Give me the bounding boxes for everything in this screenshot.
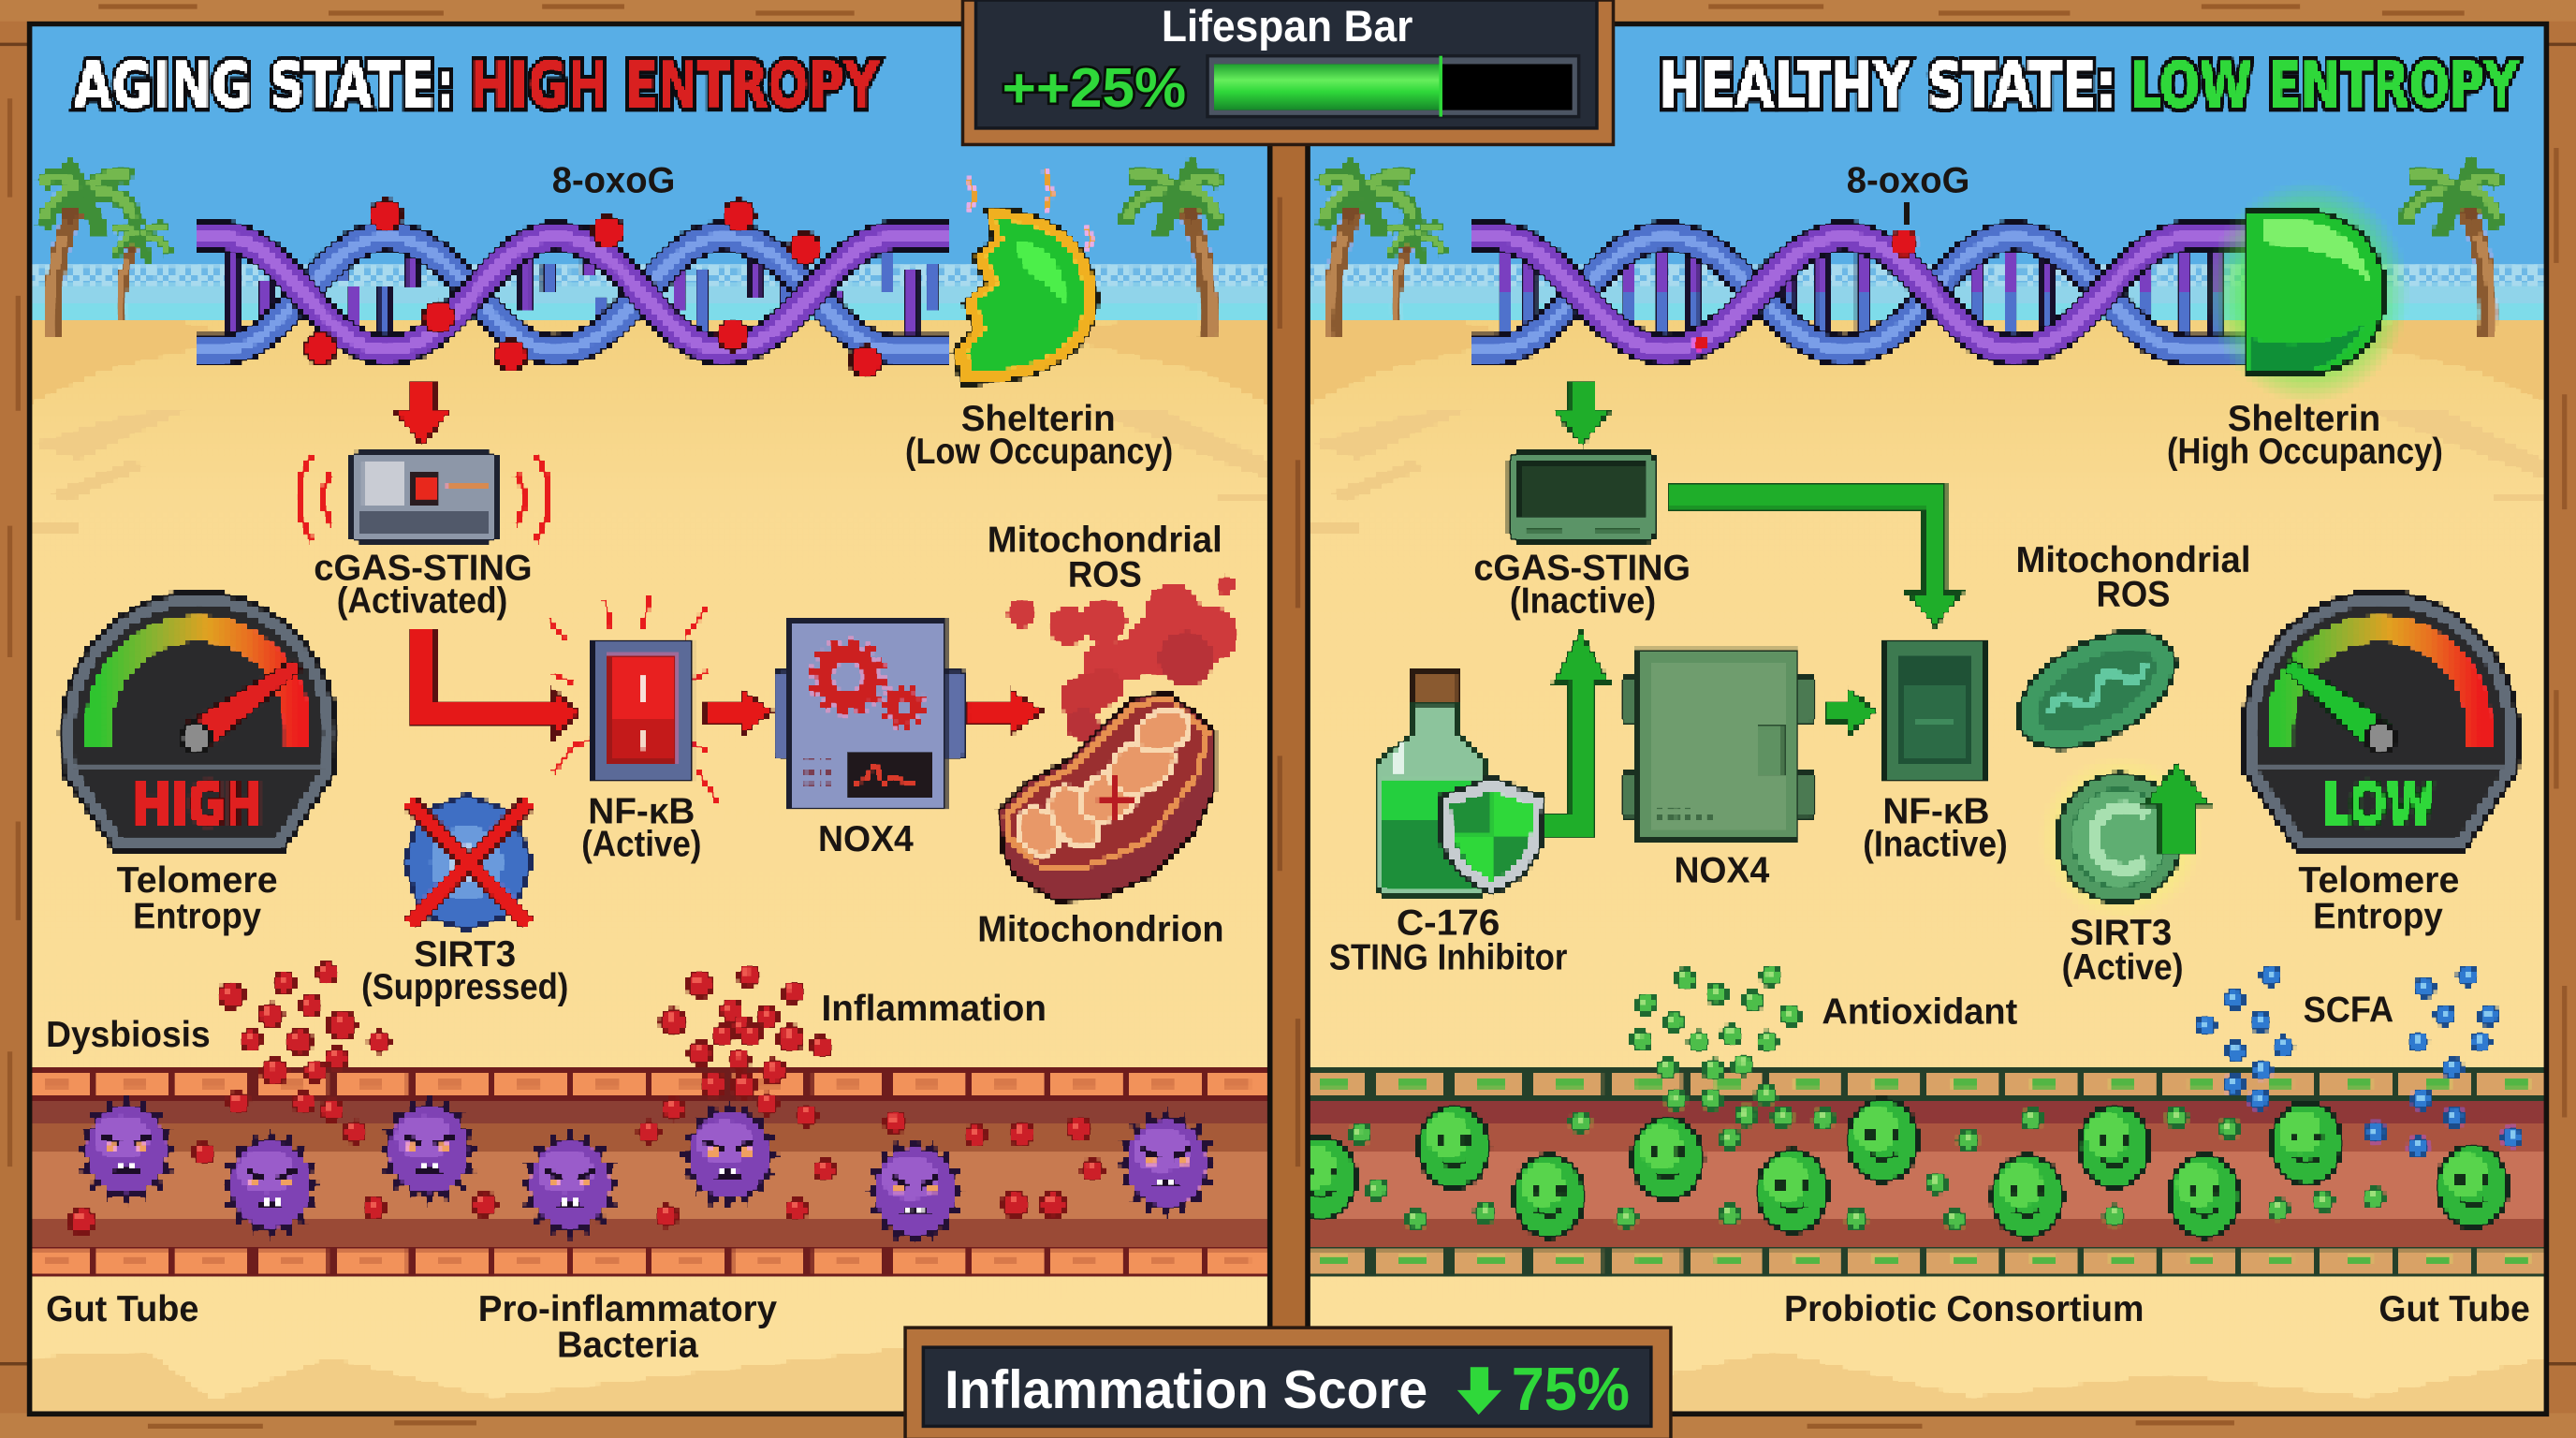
- icon: NOX4 inactive: [1621, 651, 1815, 842]
- labels: healthy state: SCFA: [2304, 990, 2393, 1031]
- labels: aging state: ROS: [1068, 555, 1142, 595]
- labels: aging state: SIRT3: [414, 934, 516, 975]
- lifespan heading: Lifespan Bar: [1162, 2, 1412, 51]
- icon: NF-kB switch on: [549, 594, 720, 805]
- labels: healthy state: STING Inhibitor: [1329, 938, 1567, 978]
- probiotic consortium: [1285, 1099, 2508, 1238]
- labels: healthy state: (Active): [2062, 947, 2184, 988]
- labels: healthy state: (Inactive): [1863, 824, 2008, 864]
- labels: healthy state: Shelterin: [2228, 399, 2380, 439]
- lifespan gauge bar: [1208, 56, 1579, 117]
- gut tube left: [30, 1068, 1268, 1278]
- icon: inhibitor shield: [1439, 777, 1544, 894]
- sky background right: [1310, 24, 2546, 1413]
- labels: healthy state: Entropy: [2313, 897, 2443, 937]
- sand left: [30, 320, 1268, 1413]
- labels: aging state: Shelterin: [961, 399, 1116, 439]
- inflammation particles: [661, 965, 832, 1098]
- labels: healthy state: C-176: [1397, 903, 1500, 944]
- labels: aging state: Entropy: [133, 897, 262, 937]
- sky background left: [30, 24, 1268, 1413]
- labels: aging state: NOX4: [818, 819, 914, 859]
- icon: telomere gauge high: HIGH: [133, 770, 263, 839]
- labels: aging state: (Activated): [337, 581, 507, 622]
- labels: healthy state: Mitochondrial: [2016, 540, 2250, 580]
- labels: healthy state: Probiotic Consortium: [1784, 1289, 2144, 1329]
- icon: mitochondrial ROS healthy: [1998, 608, 2194, 772]
- labels: aging state: Dysbiosis: [46, 1015, 211, 1055]
- labels: aging state: NF-κB: [588, 791, 695, 831]
- panel: inflammation score: [905, 1328, 1671, 1438]
- icon: ROS cloud: [1007, 575, 1238, 741]
- title: healthy state: [1660, 49, 2519, 122]
- labels: healthy state: (Inactive): [1510, 581, 1656, 622]
- labels: healthy state: ROS: [2097, 575, 2170, 615]
- palm trees left: [41, 163, 1221, 337]
- sand dunes right: [1310, 320, 2546, 1413]
- inflammation score value: 75%: [1512, 1355, 1630, 1423]
- dysbiosis particles: [219, 962, 390, 1084]
- arrow: cGAS to NF-kB: [409, 629, 580, 738]
- labels: healthy state: cGAS-STING: [1473, 549, 1690, 589]
- icon: cGAS-STING inactive: [1510, 453, 1656, 540]
- icon: shelterin intact: [2206, 181, 2410, 404]
- sea right: [1310, 263, 2546, 322]
- panel: lifespan bar: [962, 0, 1614, 144]
- labels: healthy state: Antioxidant: [1822, 991, 2017, 1032]
- arrow: damage to cGAS: [394, 381, 450, 446]
- antioxidant particles: [1632, 966, 1801, 1104]
- icon: shelterin damaged: [953, 171, 1097, 385]
- icon: C-176 bottle: [1377, 670, 1486, 896]
- gut tube right: [1310, 1068, 2546, 1278]
- SCFA particles: [2197, 966, 2522, 1156]
- panel: healthy state: [1285, 24, 2546, 1413]
- arrow: NF-kB to NOX4: [705, 690, 772, 735]
- title: aging state: [74, 49, 880, 122]
- icon: telomere gauge low: LOW: [2323, 770, 2435, 839]
- palm trees right: [1321, 163, 2500, 337]
- title: healthy state: HEALTHY STATE:: [1660, 49, 2116, 122]
- labels: aging state: Mitochondrial: [988, 521, 1222, 561]
- arrow: DNA to cGAS (green): [1554, 381, 1610, 446]
- labels: aging state: (Active): [581, 824, 701, 864]
- labels: healthy state: NOX4: [1674, 850, 1770, 890]
- labels: healthy state: SIRT3: [2070, 913, 2172, 953]
- inflammation score label: Inflammation Score: [944, 1360, 1427, 1420]
- icon: mitochondrion: [999, 694, 1214, 901]
- labels: aging state: Gut Tube: [46, 1289, 198, 1329]
- icon: NOX4 active: [775, 620, 964, 809]
- 8-oxoG damage dots left: [305, 199, 882, 377]
- labels: aging state: Mitochondrion: [977, 910, 1224, 950]
- green particles in gut: [1351, 1090, 2384, 1229]
- labels: healthy state: (High Occupancy): [2167, 432, 2443, 472]
- icon: cGAS-STING active: [299, 453, 549, 542]
- labels: aging state: (Suppressed): [361, 967, 568, 1007]
- panel: aging state: [30, 24, 1268, 1413]
- dna healthy: [1472, 237, 2247, 350]
- arrow: NOX4 to mitochondrion: [968, 690, 1043, 735]
- sand right: [1310, 320, 2546, 1413]
- labels: healthy state: Telomere: [2298, 860, 2459, 901]
- sea left: [30, 263, 1268, 322]
- arrow: C-176 to cGAS (green): [1541, 631, 1608, 838]
- labels: healthy state: 8-oxoG: [1847, 160, 1969, 200]
- dna damaged: [198, 237, 949, 350]
- icon: NF-kB switch off: [1884, 640, 1984, 781]
- labels: healthy state: Gut Tube: [2378, 1289, 2530, 1329]
- labels: aging state: (Low Occupancy): [905, 432, 1173, 472]
- arrow: cGAS to NF-kB (green): [1669, 485, 1962, 626]
- labels: aging state: cGAS-STING: [314, 549, 533, 589]
- pro-inflammatory bacteria: [76, 1094, 1218, 1247]
- labels: aging state: Bacteria: [557, 1326, 698, 1366]
- icon: down arrow: [1457, 1367, 1501, 1415]
- labels: aging state: Inflammation: [822, 989, 1046, 1029]
- icon: telomere gauge high: [61, 592, 337, 851]
- 8-oxoG damage dots right: [1693, 200, 1917, 351]
- icon: SIRT3 suppressed: [404, 795, 533, 930]
- icon: SIRT3 active: [2039, 756, 2210, 920]
- icon: telomere gauge low: [2243, 592, 2519, 851]
- labels: aging state: Pro-inflammatory: [478, 1289, 778, 1329]
- labels: healthy state: [1329, 160, 2530, 1329]
- labels: aging state: 8-oxoG: [552, 160, 675, 200]
- red particles in gut: [69, 1092, 1104, 1234]
- arrow: NOX4 to NF-kB (green): [1827, 688, 1876, 735]
- lifespan value: ++25%: [1003, 56, 1186, 119]
- title: aging state: AGING STATE:: [74, 49, 455, 122]
- labels: aging state: [46, 160, 1224, 1366]
- sand dunes left: [30, 320, 1268, 1413]
- title: aging state: HIGH ENTROPY: [470, 49, 880, 122]
- labels: healthy state: NF-κB: [1882, 791, 1989, 831]
- labels: aging state: Telomere: [117, 860, 278, 901]
